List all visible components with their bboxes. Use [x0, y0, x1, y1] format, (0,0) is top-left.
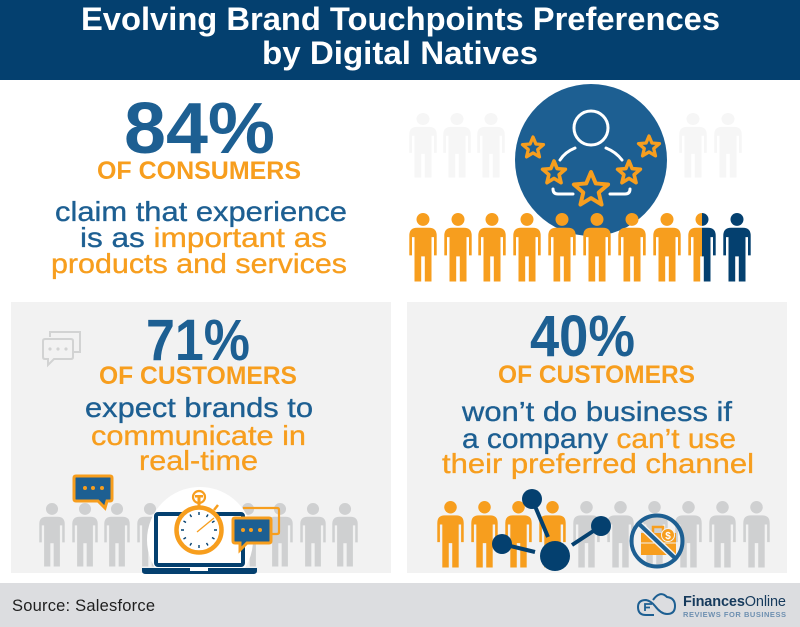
footer bar: [0, 583, 800, 627]
panel: 84% of consumers text: claim that experience: [55, 196, 347, 227]
text: 71%: expect brands to: [85, 392, 313, 423]
title: [81, 1, 720, 71]
title: by Digital Natives: [262, 35, 538, 71]
text: 71%: OF CUSTOMERS: [99, 362, 297, 390]
panel: 84% of consumers text: [51, 89, 347, 279]
gray people row: [573, 501, 770, 568]
icon: laptop: [142, 514, 257, 574]
title: Evolving Brand Touchpoints Preferences: [81, 1, 720, 37]
panel: 84% of consumers text: is as important as: [80, 222, 327, 253]
panel: 84% of consumers text: 84%: [124, 89, 275, 169]
panel: 40% of customers: [407, 302, 787, 573]
panel: 84% of consumers text: products and services: [51, 248, 347, 279]
icon: network: [492, 489, 611, 571]
panel: 71% of customers: [11, 302, 391, 593]
icon: customer rating circle: [515, 84, 667, 236]
gray people row: [39, 503, 358, 567]
icon: no money: [632, 516, 682, 566]
text: 40%: won’t do business if: [461, 396, 732, 427]
icon: stars: [523, 136, 659, 205]
orange people row: [409, 213, 751, 282]
logo: FinancesOnline: REVIEWS FOR BUSINESS: [683, 610, 786, 619]
text: 40%: a company can’t use: [462, 423, 736, 454]
icon: chat outline: [43, 332, 80, 365]
source text: Source: Salesforce: [12, 597, 155, 615]
icon: user outline: [553, 111, 630, 194]
header banner: [0, 0, 800, 80]
text: 40%: 40%: [530, 304, 635, 369]
text: 40%: their preferred channel: [442, 448, 754, 479]
icon: chat bubble left: [74, 476, 112, 508]
text: 71%: communicate in: [91, 420, 306, 451]
wordmark: FinancesOnline: [683, 594, 786, 610]
text: 71%: [85, 308, 313, 476]
orange people row: [437, 501, 566, 568]
icon: chat bubble front: [233, 518, 271, 550]
text: 71%: real-time: [139, 445, 258, 476]
faint people row: [409, 113, 742, 178]
text: 71%: 71%: [146, 308, 250, 373]
icon: briefcase with coin: $: [665, 531, 671, 542]
icon: cloud: [638, 594, 675, 615]
text: 40%: [442, 304, 754, 479]
text: 40%: OF CUSTOMERS: [498, 361, 695, 389]
icon: chat bubble back outline: [243, 508, 279, 534]
panel: 84% of consumers text: OF CONSUMERS: [97, 157, 301, 185]
white circle backdrop: [147, 487, 253, 568]
logo: FinancesOnline: [638, 594, 786, 619]
icon: stopwatch: [176, 491, 222, 552]
